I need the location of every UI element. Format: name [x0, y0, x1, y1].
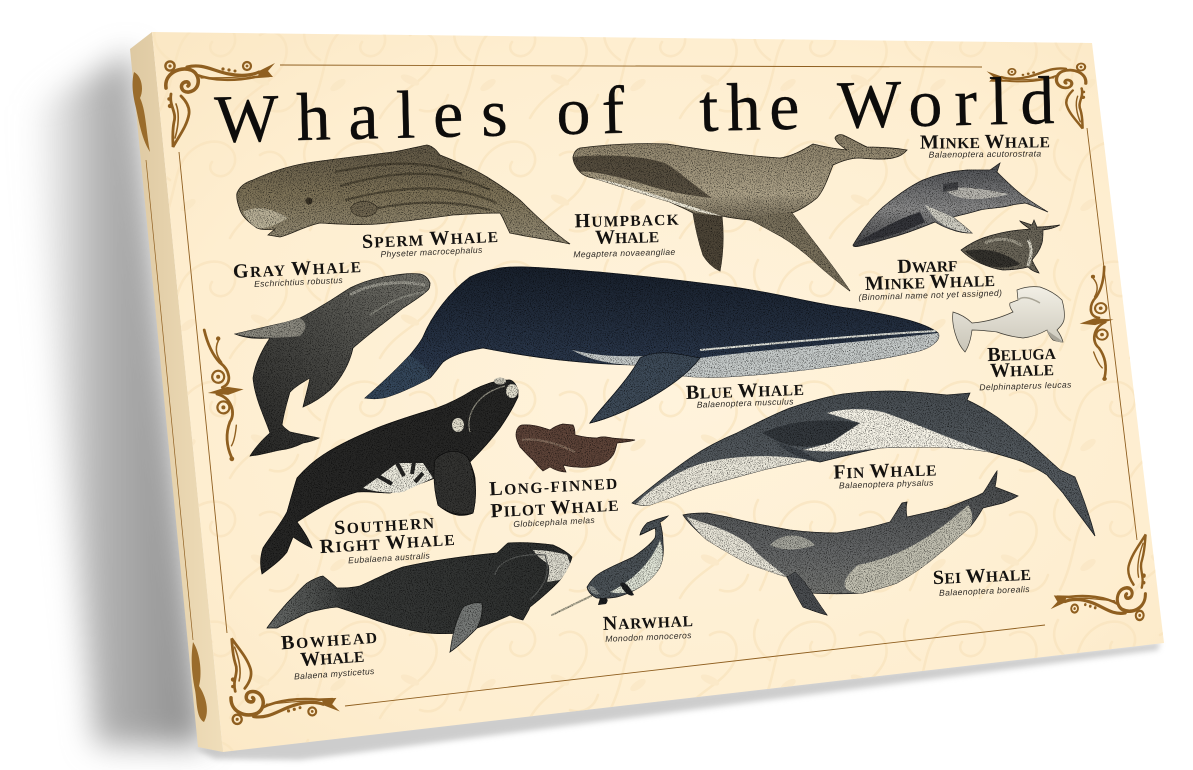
label: blue whale: Balaenoptera musculus [697, 396, 794, 410]
label: humpback whale: WHALE [595, 225, 659, 249]
label: sei whale: Balaenoptera borealis [939, 584, 1030, 598]
label: long-finned pilot whale: Globicephala melas [513, 515, 596, 529]
label: gray whale: GRAY WHALE [233, 255, 361, 283]
label: humpback whale: HUMPBACK [574, 208, 679, 232]
whale: beluga [953, 287, 1064, 352]
whale: fin [632, 391, 1095, 536]
label: long-finned pilot whale: PILOT WHALE [490, 494, 619, 522]
label: minke whale: MINKE WHALE [920, 130, 1050, 154]
ornament: top left corner [165, 61, 275, 147]
label: fin whale: Balaenoptera physalus [839, 477, 934, 490]
whale: humpback [573, 135, 907, 291]
whale: sei [683, 471, 1018, 615]
label: southern right whale [318, 510, 456, 567]
label: southern right whale: Eubalaena australis [348, 550, 431, 565]
ornament: right side [1073, 266, 1121, 383]
title: Whales [214, 74, 508, 157]
whale: southern right [261, 378, 518, 574]
whale: long-finned pilot [516, 424, 635, 472]
label: sperm whale: SPERM WHALE [362, 225, 498, 253]
label: bowhead whale: BOWHEAD [280, 626, 378, 654]
label: bowhead whale: Balaena mysticetus [294, 666, 375, 682]
label: narwhal [602, 609, 694, 644]
label: dwarf minke whale: MINKE WHALE [865, 269, 995, 295]
title: World [836, 62, 1055, 143]
label: dwarf minke whale: DWARF [897, 254, 958, 278]
label: fin whale: FIN WHALE [833, 458, 937, 484]
label: sei whale [932, 563, 1032, 598]
ornament: bottom right corner [1050, 526, 1152, 620]
label: long-finned pilot whale: LONG-FINNED [489, 472, 618, 500]
label: beluga whale: Delphinapterus leucas [979, 379, 1072, 392]
canvas front panel [152, 32, 1164, 752]
label: narwhal: Monodon monoceros [605, 630, 692, 644]
label: sei whale: SEI WHALE [932, 563, 1031, 589]
whale: narwhal [552, 516, 668, 615]
whale: dwarf minke [961, 220, 1060, 273]
label: dwarf minke whale [857, 253, 1002, 302]
label: beluga whale: BELUGA [987, 342, 1057, 366]
label: southern right whale: SOUTHERN [334, 511, 435, 539]
whale: bowhead [267, 543, 572, 652]
label: sperm whale: Physeter macrocephalus [380, 245, 483, 259]
whale: minke [853, 163, 1048, 247]
label: gray whale: Eschrichtius robustus [254, 275, 344, 289]
label: long-finned pilot whale [489, 472, 619, 530]
label: beluga whale: WHALE [990, 358, 1054, 382]
label: narwhal: NARWHAL [602, 609, 693, 635]
title: of [556, 72, 626, 149]
label: beluga whale [978, 341, 1072, 392]
label: humpback whale [572, 208, 680, 259]
title: the [698, 68, 800, 146]
title [214, 62, 1055, 157]
ornament: top right corner [987, 63, 1089, 135]
label: southern right whale: RIGHT WHALE [319, 528, 455, 558]
label: dwarf minke whale: (Binominal name not yet assigned) [858, 288, 1002, 302]
label: bowhead whale: WHALE [300, 645, 365, 671]
whale: blue [365, 267, 939, 423]
canvas side edge [130, 32, 223, 752]
whale: sperm [237, 145, 570, 244]
label: bowhead whale [280, 626, 380, 682]
ornament: bottom left corner [224, 628, 340, 724]
label: blue whale: BLUE WHALE [686, 378, 804, 404]
whale: gray [235, 274, 430, 456]
ornament: left side [201, 327, 251, 463]
label: humpback whale: Megaptera novaeangliae [573, 247, 676, 259]
label: minke whale: Balaenoptera acutorostrata [929, 148, 1041, 160]
